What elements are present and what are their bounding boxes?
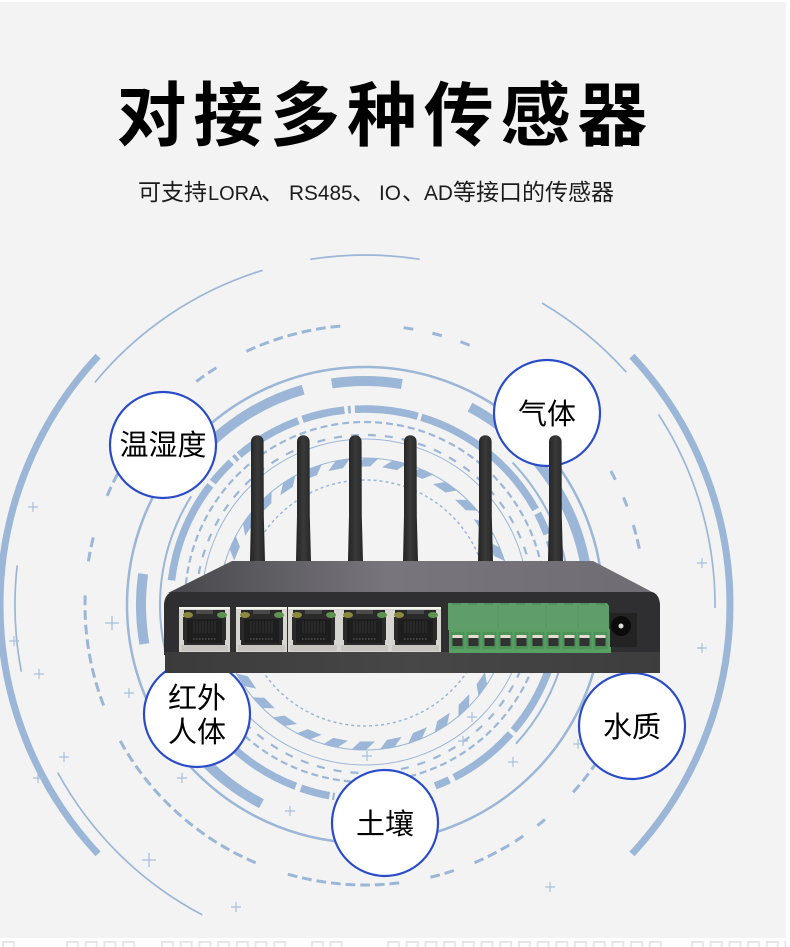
subtitle: RS485 — [289, 182, 353, 205]
ring: thin arcs — [119, 359, 611, 851]
subtitle: 、 — [402, 179, 425, 205]
bottom decorative strip — [2, 941, 786, 947]
power jack — [610, 613, 637, 647]
router front face — [164, 592, 660, 655]
ring: inner dashed — [196, 435, 534, 773]
ring: hairline — [202, 439, 528, 765]
ring: dashed — [185, 422, 545, 782]
subtitle: LORA — [208, 183, 263, 205]
antennas — [250, 435, 563, 561]
sensor bubble: infrared human body — [144, 661, 250, 767]
subtitle: 、 — [352, 179, 375, 205]
ethernet ports — [179, 607, 441, 652]
sensor bubble: gas — [494, 360, 600, 466]
concentric ring graphic — [0, 216, 754, 947]
ring: wide segmented band — [63, 303, 667, 907]
subtitle: 可支持 — [138, 179, 207, 205]
sensor bubble: infrared human body: 红外 — [168, 682, 226, 715]
router top face — [168, 561, 654, 593]
green terminal block — [448, 603, 611, 653]
title: 对接多种传感器 — [116, 77, 654, 155]
subtitle: IO — [379, 182, 401, 205]
sensor bubble: temperature and humidity: 温湿度 — [119, 429, 207, 462]
sensor bubble: water quality — [579, 673, 685, 779]
subtitle: 等接口的传感器 — [453, 179, 614, 205]
sensor bubble: water quality: 水质 — [603, 711, 661, 744]
ring: sparse dashed — [0, 216, 754, 947]
sensor bubble: temperature and humidity — [110, 392, 216, 498]
ring: medium line — [127, 367, 603, 843]
subtitle: 、 — [261, 179, 284, 205]
subtitle: AD — [424, 182, 453, 205]
plus markers — [9, 502, 707, 912]
ring: inner segmented band — [170, 409, 560, 799]
router — [164, 561, 660, 673]
sensor bubble: soil: 土壤 — [356, 808, 414, 841]
router lower lip — [165, 652, 660, 673]
ring: inner dotted — [242, 480, 488, 726]
sensor bubble: soil — [332, 770, 438, 876]
sensor bubble: infrared human body: 人体 — [168, 716, 226, 749]
ring: outer thick arcs — [0, 356, 730, 854]
sensor bubble: gas: 气体 — [518, 398, 576, 431]
ring: outer thin arcs — [15, 255, 715, 915]
ring: hatched band — [219, 458, 511, 750]
